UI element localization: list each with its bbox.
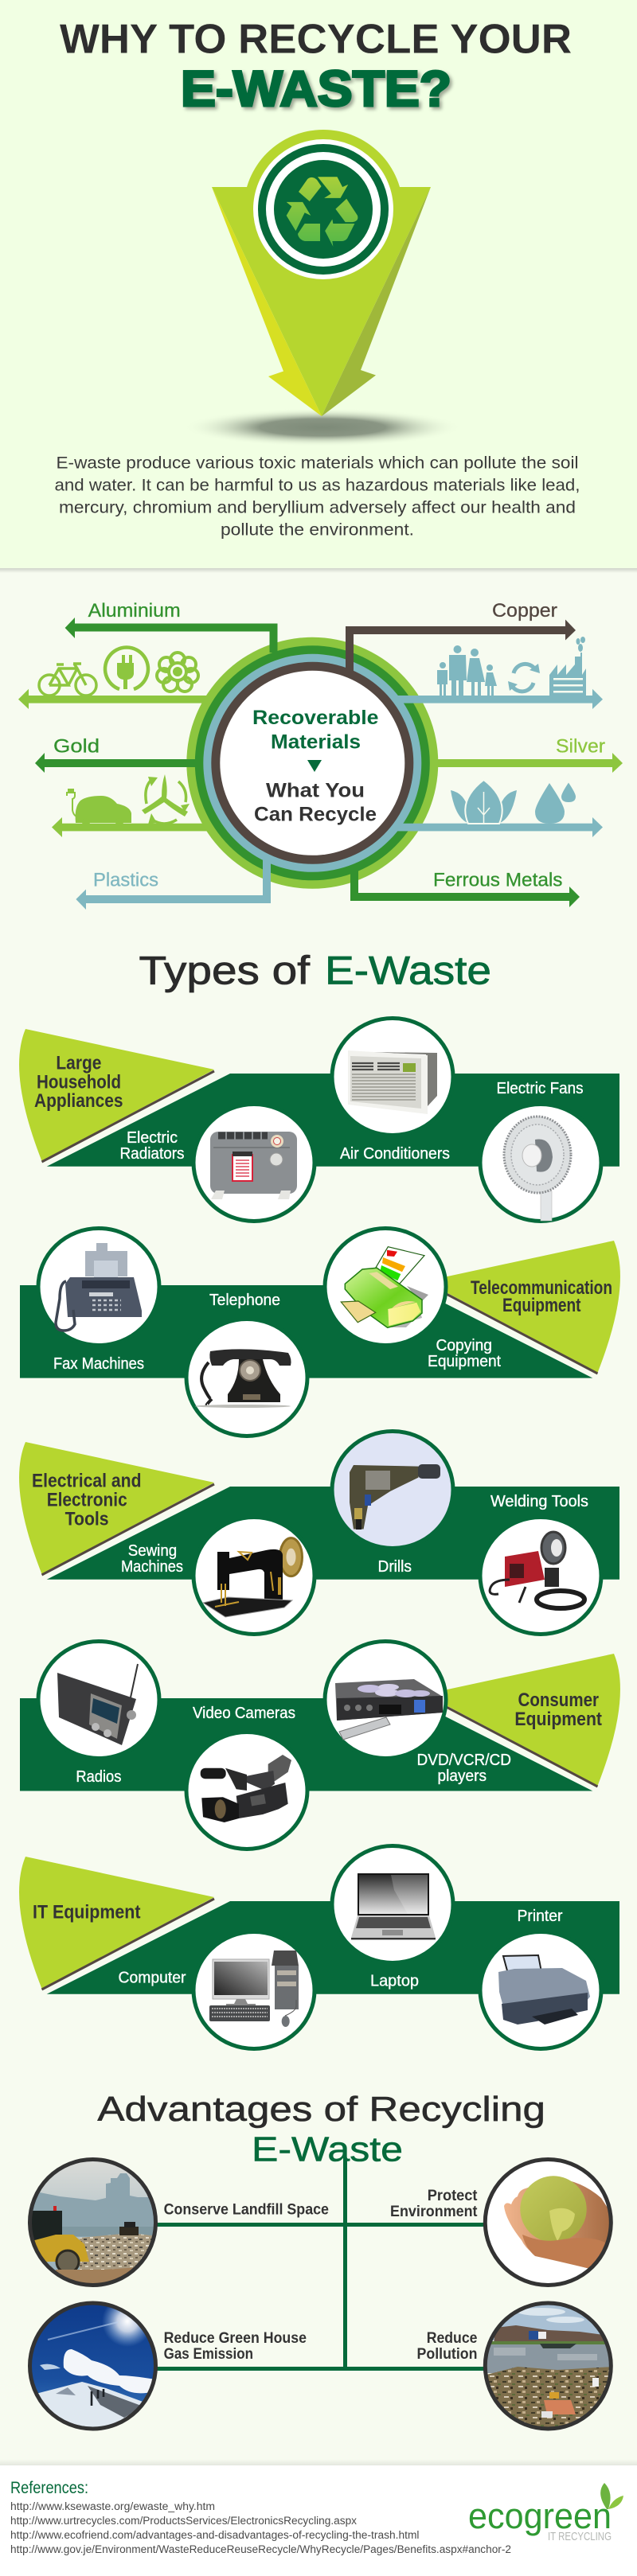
references list xyxy=(10,2500,511,2555)
item: laptop xyxy=(332,1846,453,1990)
advantage: reduce green house gas emission: Gas Emission xyxy=(164,2345,253,2363)
item: computer: Computer xyxy=(118,1970,186,1987)
panel: electrical and electronic tools xyxy=(19,1431,619,1635)
arrow: aluminium xyxy=(65,600,273,653)
heading: types of e-waste: E-Waste xyxy=(325,949,491,993)
icon: down arrow with recycle badge xyxy=(212,130,431,416)
item: electric radiators: Electric xyxy=(127,1129,178,1147)
arrow: ferrous metals xyxy=(354,869,580,907)
arrow: aluminium: Aluminium xyxy=(88,600,181,622)
title line: WHY TO RECYCLE YOUR xyxy=(60,16,572,62)
ring centre text: What You xyxy=(266,780,365,802)
category fan xyxy=(425,1654,620,1787)
category fan: Large xyxy=(56,1053,101,1074)
references heading: References: xyxy=(10,2479,88,2497)
arrow: ferrous metals: Ferrous Metals xyxy=(433,869,562,891)
item: drills xyxy=(332,1431,453,1576)
title highlight: E-WASTE? xyxy=(181,61,451,117)
category fan: Electrical and xyxy=(32,1471,142,1492)
item: laptop: Laptop xyxy=(370,1973,419,1990)
category fan xyxy=(425,1241,620,1374)
item: dvd players: DVD/VCR/CD xyxy=(417,1752,511,1769)
references list: http://www.urtrecycles.com/ProductsServices/ElectronicsRecycling.aspx xyxy=(10,2515,357,2527)
icon: flower xyxy=(157,653,198,692)
category fan xyxy=(19,1442,214,1575)
item: dvd players: players xyxy=(438,1767,487,1785)
category fan xyxy=(19,1029,214,1162)
ribbon xyxy=(47,1074,619,1167)
item: radios xyxy=(38,1641,159,1786)
icon: plug xyxy=(105,648,148,689)
advantage: reduce pollution: Reduce xyxy=(427,2329,478,2347)
ribbon xyxy=(47,1901,619,1994)
intro paragraph: mercury, chromium and beryllium adversely affect our health and xyxy=(59,498,576,517)
panel: recoverable materials xyxy=(18,600,623,910)
item: video cameras xyxy=(186,1705,307,1849)
heading: advantages of recycling e-waste xyxy=(97,2090,545,2169)
arrow: gold xyxy=(35,735,197,773)
advantage: protect environment: Protect xyxy=(428,2187,478,2204)
item: fax machines xyxy=(38,1229,159,1373)
item: printer xyxy=(480,1908,601,2048)
item: copying equipment: Equipment xyxy=(428,1353,501,1370)
advantage: conserve landfill space xyxy=(28,2157,329,2287)
arrow: plastics: Plastics xyxy=(93,869,158,891)
item: welding tools xyxy=(480,1493,601,1635)
advantage: protect environment xyxy=(390,2160,613,2286)
category fan: Electronic xyxy=(47,1489,127,1510)
item: computer xyxy=(118,1932,315,2048)
icon: electric car xyxy=(67,789,131,826)
icon: leaves xyxy=(451,780,517,824)
references list: http://www.gov.je/Environment/WasteReduceReuseRecycle/WhyRecycle/Pages/Benefits.aspx#anchor-2 xyxy=(10,2543,511,2555)
ring centre text: Materials xyxy=(271,731,361,753)
item: fax machines: Fax Machines xyxy=(53,1355,144,1373)
item: air conditioners xyxy=(332,1019,453,1163)
advantage: protect environment: Environment xyxy=(390,2203,478,2220)
heading: types of e-waste xyxy=(139,949,491,993)
icon: bicycle xyxy=(39,664,96,696)
ring diagram xyxy=(186,637,603,889)
arrow shadow xyxy=(183,408,462,446)
logo: ecogreen: ecogreen xyxy=(468,2496,612,2536)
panel: intro xyxy=(0,0,637,573)
arrow: copper xyxy=(350,600,576,672)
item: electric radiators: Radiators xyxy=(119,1145,185,1163)
arrow: teal upper xyxy=(396,689,603,709)
connector tree xyxy=(156,2158,486,2371)
ring centre text xyxy=(252,707,379,826)
item: copying equipment xyxy=(325,1229,501,1370)
category fan: IT Equipment xyxy=(33,1902,140,1923)
panel: it equipment xyxy=(19,1846,619,2048)
intro paragraph: pollute the environment. xyxy=(221,520,414,540)
item: electric radiators xyxy=(119,1105,315,1221)
item: drills: Drills xyxy=(377,1558,412,1576)
item: sewing machines: Machines xyxy=(121,1558,183,1576)
item: welding tools: Welding Tools xyxy=(490,1493,588,1510)
item: air conditioners: Air Conditioners xyxy=(340,1145,450,1163)
advantage: reduce green house gas emission xyxy=(28,2296,307,2434)
advantage: conserve landfill space: Conserve Landfill Space xyxy=(164,2201,329,2219)
references list: http://www.ksewaste.org/ewaste_why.htm xyxy=(10,2500,215,2512)
panel: footer xyxy=(0,2459,637,2576)
ribbon xyxy=(20,1285,592,1378)
item: dvd players xyxy=(325,1641,511,1785)
arrow: gold: Gold xyxy=(53,735,100,758)
arrow: copper: Copper xyxy=(492,600,557,622)
category fan: Tools xyxy=(65,1508,109,1530)
icon: recycle arrows xyxy=(508,664,540,692)
item: sewing machines: Sewing xyxy=(128,1542,177,1560)
item: telephone: Telephone xyxy=(209,1292,280,1309)
category fan: Consumer xyxy=(518,1689,599,1711)
category fan: Household xyxy=(37,1071,121,1093)
ribbon xyxy=(47,1487,619,1580)
ring centre text: Recoverable xyxy=(252,707,379,729)
arrow: light green upper xyxy=(18,689,212,709)
item: radios: Radios xyxy=(76,1768,121,1786)
arrow: silver xyxy=(434,735,623,773)
ring centre text: Can Recycle xyxy=(254,804,377,826)
arrow: silver: Silver xyxy=(556,735,605,758)
item: electric fans xyxy=(480,1080,601,1221)
intro paragraph: E-waste produce various toxic materials which can pollute the soil xyxy=(56,454,578,473)
category fan: Equipment xyxy=(502,1295,581,1316)
category fan xyxy=(19,1857,214,1989)
logo: ecogreen xyxy=(468,2483,623,2543)
panel: advantages xyxy=(28,2157,613,2434)
heading: advantages of recycling e-waste: E-Waste xyxy=(252,2130,403,2169)
advantage: reduce pollution: Pollution xyxy=(417,2345,478,2363)
panel: consumer equipment xyxy=(20,1641,620,1849)
item: video cameras: Video Cameras xyxy=(193,1705,295,1722)
advantage: reduce pollution xyxy=(417,2301,613,2431)
arrow: teal lower xyxy=(396,817,603,837)
heading: types of e-waste: Types of xyxy=(139,949,310,993)
arrow: light green lower xyxy=(52,817,213,837)
icon: water drops xyxy=(535,783,576,824)
item: sewing machines xyxy=(121,1517,315,1635)
item: copying equipment: Copying xyxy=(436,1337,492,1354)
panel: large household appliances xyxy=(19,1019,619,1221)
item: electric fans: Electric Fans xyxy=(497,1080,583,1097)
arrow: plastics xyxy=(76,859,267,910)
logo: ecogreen: IT RECYCLING xyxy=(548,2531,612,2543)
advantage: reduce green house gas emission: Reduce Green House xyxy=(164,2329,307,2347)
category fan: Equipment xyxy=(514,1709,602,1730)
ribbon xyxy=(20,1698,592,1791)
panel: telecommunication equipment xyxy=(20,1229,620,1436)
icon: factory xyxy=(549,637,586,696)
references list: http://www.ecofriend.com/advantages-and-disadvantages-of-recycling-the-trash.html xyxy=(10,2529,419,2541)
icon: family xyxy=(437,645,497,696)
heading: advantages of recycling e-waste: Advantages of Recycling xyxy=(97,2090,545,2129)
item: telephone xyxy=(186,1292,307,1436)
intro paragraph xyxy=(54,454,580,540)
category fan: Appliances xyxy=(34,1090,123,1112)
intro paragraph: and water. It can be harmful to us as hazardous materials like lead, xyxy=(54,476,580,495)
icon: wind turbine xyxy=(142,774,190,824)
item: printer: Printer xyxy=(518,1908,563,1925)
icon: recycle symbol xyxy=(287,177,358,247)
